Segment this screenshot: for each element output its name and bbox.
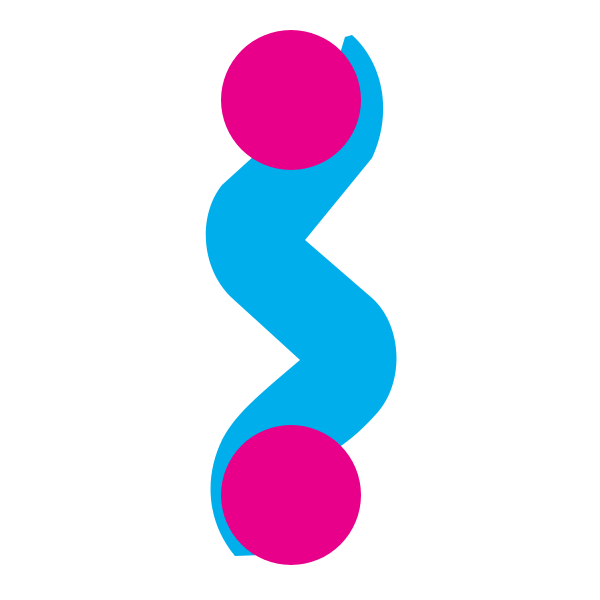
bottom pink circle [221,425,361,565]
top pink circle [221,30,361,170]
blue wave band [206,35,397,556]
